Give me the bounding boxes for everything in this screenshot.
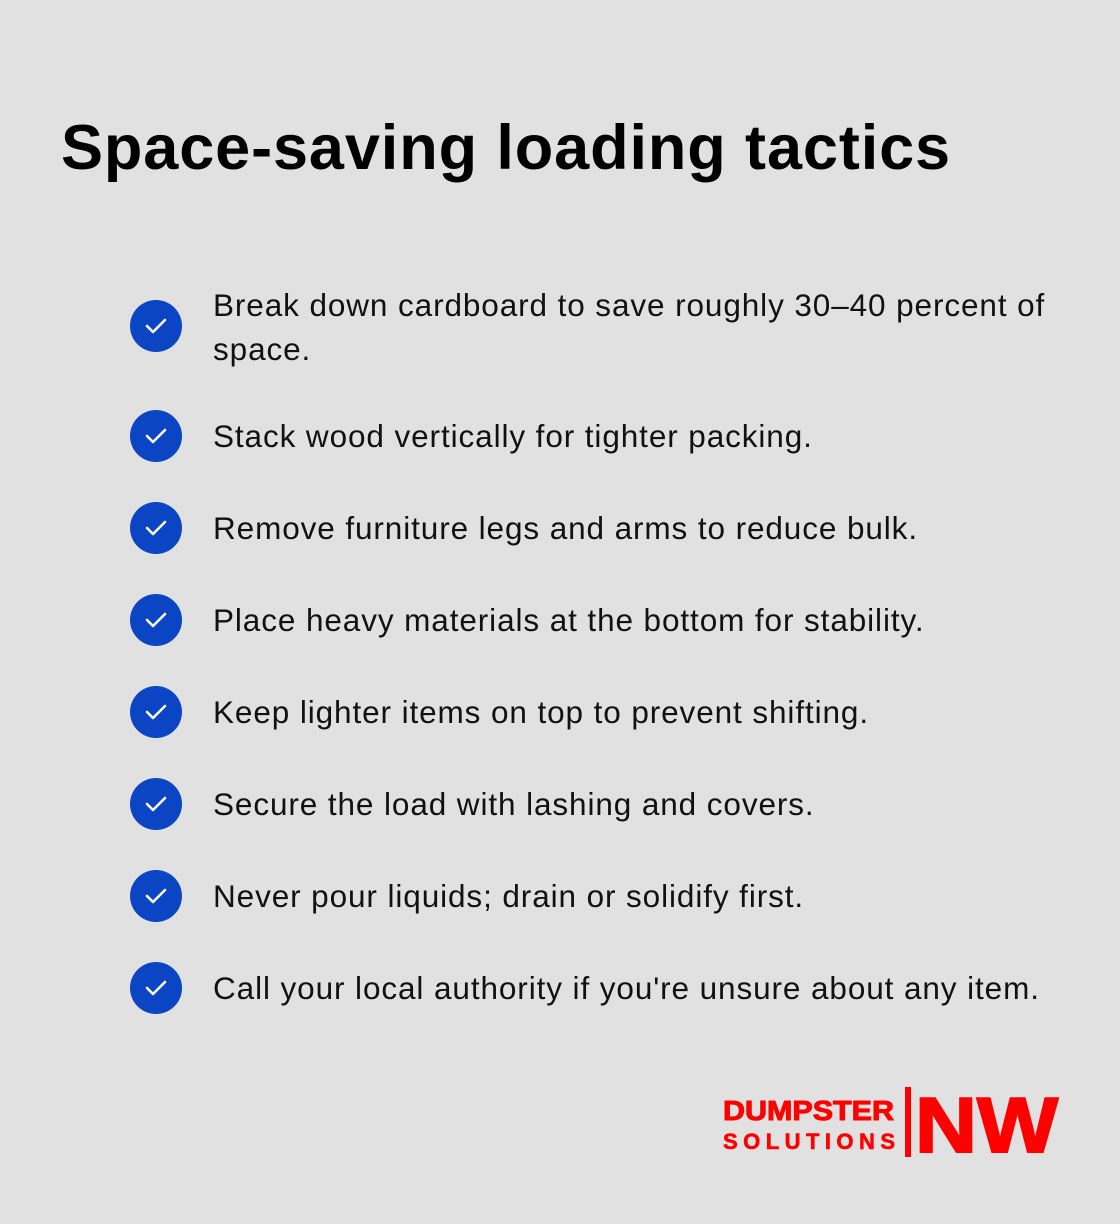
item 8: [130, 962, 1040, 1014]
item 4: [130, 594, 924, 646]
icon: check: [130, 300, 182, 352]
item 8: Call your local authority if you're unsure about any item.: [213, 970, 1040, 1006]
icon: check: [130, 962, 182, 1014]
logo: [723, 1086, 1060, 1158]
item 1: Break down cardboard to save roughly 30–40 percent of space.: [213, 287, 1045, 367]
logo: SOLUTIONS: [723, 1129, 895, 1154]
item 3: Remove furniture legs and arms to reduce bulk.: [213, 510, 918, 546]
icon: check: [130, 594, 182, 646]
item 2: Stack wood vertically for tighter packing.: [213, 418, 813, 454]
item 2: [130, 410, 813, 462]
item 6: [130, 778, 815, 830]
item 4: Place heavy materials at the bottom for stability.: [213, 602, 924, 638]
icon: check: [130, 410, 182, 462]
title: Space-saving loading tactics: [61, 113, 951, 183]
icon: check: [130, 686, 182, 738]
icon: check: [130, 502, 182, 554]
logo: DUMPSTER: [723, 1095, 894, 1126]
item 5: Keep lighter items on top to prevent shifting.: [213, 694, 869, 730]
item 5: [130, 686, 869, 738]
item 7: [130, 870, 804, 922]
icon: check: [130, 870, 182, 922]
item 7: Never pour liquids; drain or solidify first.: [213, 878, 804, 914]
item 6: Secure the load with lashing and covers.: [213, 786, 815, 822]
icon: check: [130, 778, 182, 830]
item 3: [130, 502, 918, 554]
